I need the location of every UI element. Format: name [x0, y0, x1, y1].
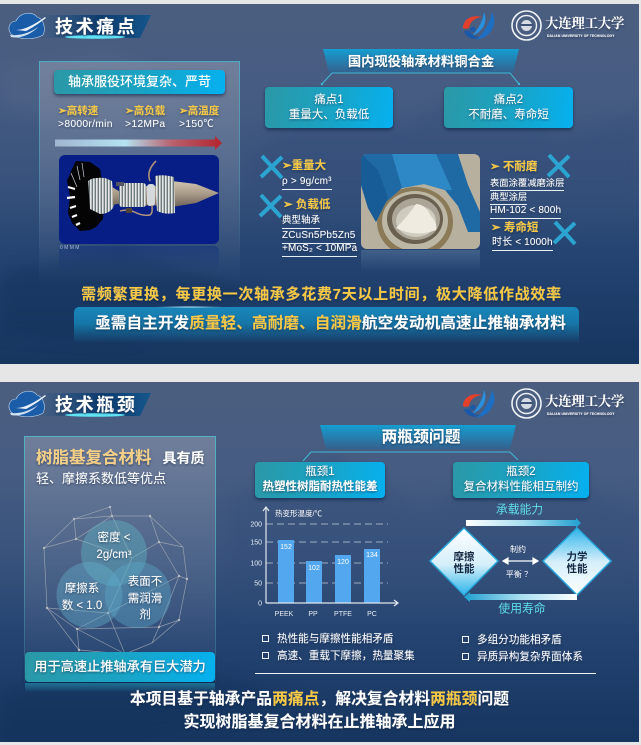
label: ➢ 负载低 — [283, 199, 330, 211]
pill: great potential — [25, 652, 215, 682]
y axis labels: 0 — [258, 600, 262, 608]
bar values: 134 — [366, 552, 378, 559]
value: 时长 < 1000h — [492, 237, 553, 248]
pill: pain point 2 — [444, 87, 573, 128]
bullet 2: 高速、重载下摩擦，热量聚集 — [277, 650, 415, 662]
title: 瓶颈2 — [506, 466, 536, 478]
logo: school emblem swirl — [463, 390, 494, 418]
university English name: DALIAN UNIVERSITY OF TECHNOLOGY — [547, 34, 615, 38]
icon: cloud and plane logo — [8, 390, 46, 417]
engine image — [59, 155, 219, 258]
y axis labels — [250, 522, 262, 608]
banner shape — [46, 393, 151, 417]
x axis labels — [275, 611, 377, 618]
highlight — [154, 306, 224, 308]
slide: technical bottlenecks — [0, 382, 639, 742]
heading text: 技术瓶颈 — [55, 395, 137, 415]
title: 痛点1 — [314, 94, 344, 106]
polyhedron nodes — [43, 506, 188, 651]
block: low load — [282, 198, 358, 257]
pill reflection — [25, 683, 215, 692]
bullet 1 — [462, 633, 562, 648]
university English name: DALIAN UNIVERSITY OF TECHNOLOGY — [547, 412, 615, 416]
circle: self lubrication — [105, 562, 171, 628]
university name: 大连理工大学 — [545, 391, 624, 410]
pill: bottleneck 2 — [453, 462, 589, 498]
background texture — [12, 264, 201, 288]
y axis labels: 100 — [250, 560, 262, 568]
description: 不耐磨、寿命短 — [468, 109, 549, 121]
panel heading pill: 轴承服役环境复杂、严苛 — [68, 74, 211, 89]
image caption marks: 0 M M M — [60, 245, 79, 251]
panel heading pill — [54, 70, 225, 94]
circle text: friction coefficient: 摩擦系 — [65, 583, 99, 595]
coating: 表面涂覆减磨涂层 — [490, 178, 564, 188]
diamond: friction performance — [430, 528, 498, 595]
title: 痛点2 — [494, 94, 523, 106]
description: 热塑性树脂耐热性能差 — [262, 481, 378, 493]
arrow: service life — [464, 592, 577, 602]
circle text: density — [96, 531, 132, 562]
label: ➢ 寿命短 — [491, 222, 538, 234]
heading text: 两瓶颈问题 — [382, 429, 460, 446]
double arrow — [503, 558, 538, 564]
circle text: self lubrication: 剂 — [139, 609, 151, 621]
bullets: bottleneck 1 — [262, 632, 415, 662]
panel: resin matrix composites — [24, 436, 216, 682]
heading: two bottlenecks — [302, 425, 518, 462]
background texture — [0, 382, 639, 742]
value: ρ > 9g/cm³ — [282, 176, 332, 187]
summary line 1: 本项目基于轴承产品两痛点，解决复合材料两瓶颈问题 — [130, 691, 509, 708]
text: project summary — [0, 689, 639, 734]
condition: high temperature — [179, 105, 220, 130]
icon: cloud and plane logo — [8, 12, 46, 39]
diamond text: friction performance: 摩擦 — [454, 550, 475, 563]
circle text: self lubrication: 需润滑 — [128, 592, 162, 604]
university name: 大连理工大学 — [545, 13, 624, 32]
panel: service environment — [39, 61, 240, 285]
bar values — [280, 544, 378, 572]
y axis labels: 200 — [250, 522, 262, 528]
logo: school emblem swirl — [463, 12, 494, 40]
x axis labels: PP — [308, 611, 318, 618]
logo: Dalian University of Technology — [511, 10, 624, 41]
circle text: self lubrication: 表面不 — [128, 576, 162, 588]
bearing load value: +MoS₂ < 10MPa — [282, 243, 357, 254]
circle text: density: 密度 < — [98, 532, 130, 544]
x axis labels: PTFE — [334, 611, 352, 618]
divider line — [255, 673, 596, 674]
icon: cross, low load — [258, 194, 282, 218]
condition: high speed — [58, 105, 113, 130]
banner shape — [46, 15, 151, 39]
bars — [278, 540, 380, 603]
diagram: performance trade-off: 性能 — [566, 562, 588, 575]
arrow: load capacity — [466, 518, 581, 528]
icon: cross, heavy weight — [260, 154, 284, 180]
description: 重量大、负载低 — [289, 109, 369, 121]
axis title: 热变形温度/℃ — [275, 508, 323, 518]
bullets: bottleneck 2 — [462, 633, 572, 665]
text: frequent replacement: 需频繁更换，每更换一次轴承多花费7天以上时间，极大降低作战效率 — [81, 286, 562, 303]
bar values: 120 — [337, 559, 349, 566]
bar values: 102 — [308, 565, 320, 572]
trapezoid and connector lines — [320, 49, 520, 86]
header banner: 技术痛点 — [8, 12, 151, 39]
pill: pain point 1 — [265, 87, 393, 128]
goal text: 亟需自主开发质量轻、高耐磨、自润滑航空发动机高速止推轴承材料 — [95, 315, 566, 332]
trapezoid and connector lines — [302, 425, 518, 462]
diagram: performance trade-off: 性能 — [454, 562, 475, 575]
circle text: friction coefficient: 数 < 1.0 — [62, 600, 102, 612]
diamond text: mechanical performance: 力学 — [566, 550, 588, 563]
label: ➢高负载 — [125, 105, 165, 117]
label: constraint: 制约 — [510, 544, 526, 554]
value: >12MPa — [125, 119, 165, 130]
icon: cross, not wear resistant — [546, 154, 570, 178]
label: load capacity: 承载能力 — [496, 502, 543, 516]
value: >150℃ — [179, 119, 214, 130]
circle text: self lubrication — [128, 575, 162, 621]
header banner: 技术瓶颈 — [8, 390, 151, 417]
pill: bottleneck 1 — [255, 462, 385, 498]
label: ➢ 不耐磨 — [490, 161, 537, 173]
photo: worn bearing — [361, 154, 480, 266]
axes — [263, 507, 398, 606]
heading text: 技术痛点 — [55, 17, 137, 37]
slide: technical pain points — [0, 4, 639, 364]
diamond: mechanical performance — [543, 528, 611, 595]
circle: friction coefficient — [56, 562, 122, 628]
seal — [511, 388, 542, 419]
icon: cross, short service life — [552, 220, 576, 246]
pill: great potential: 用于高速止推轴承有巨大潜力 — [34, 659, 206, 674]
typical coating: 典型涂层 — [490, 192, 527, 202]
label: ➢高转速 — [58, 105, 98, 117]
bullet 1: 热性能与摩擦性能相矛盾 — [277, 633, 394, 645]
y axis labels: 50 — [254, 580, 262, 588]
description: 复合材料性能相互制约 — [464, 481, 578, 493]
label: ➢高温度 — [179, 105, 219, 117]
coating life: HM-102 < 800h — [490, 205, 561, 216]
x axis labels: PC — [367, 611, 377, 618]
panel heading: 树脂基复合材料 具有质 — [36, 449, 204, 467]
block: heavy weight — [282, 158, 332, 190]
bearing alloy: ZCuSn5Pb5Zn5 — [282, 230, 356, 241]
summary line 2: 实现树脂基复合材料在止推轴承上应用 — [183, 714, 456, 731]
title: 瓶颈1 — [305, 466, 335, 478]
block: not wear resistant — [490, 160, 564, 219]
bar chart: heat deflection temperature — [250, 506, 399, 618]
arrow: rising severity — [55, 136, 222, 150]
grid lines — [266, 524, 388, 583]
label: balance: 平衡 ？ — [506, 569, 532, 579]
label: ➢重量大 — [282, 160, 326, 172]
bar values: 152 — [280, 544, 292, 551]
bullet 1: 多组分功能相矛盾 — [477, 634, 562, 646]
wire polyhedron — [44, 507, 187, 654]
heading: current copper alloy — [320, 49, 520, 86]
panel body text: 轻、摩擦系数低等优点 — [36, 471, 166, 486]
bar: development goal — [74, 307, 579, 343]
circle text: friction coefficient — [62, 582, 103, 612]
x axis labels: PEEK — [275, 611, 294, 618]
circle: density — [81, 520, 147, 586]
heading text: 国内现役轴承材料铜合金 — [348, 54, 494, 69]
network polyhedron and three property circles — [42, 506, 188, 652]
label: service life: 使用寿命 — [498, 602, 546, 616]
value: >8000r/min — [58, 119, 113, 130]
seal — [511, 10, 542, 41]
block: short service life — [491, 220, 553, 251]
condition: high load — [125, 105, 166, 130]
logo: Dalian University of Technology — [511, 388, 624, 419]
y axis labels: 150 — [250, 540, 262, 546]
bullet 2: 异质异构复杂界面体系 — [477, 651, 583, 663]
circle text: density: 2g/cm³ — [96, 548, 132, 560]
diagram: performance trade-off — [428, 500, 588, 618]
typical bearing: 典型轴承 — [282, 215, 320, 226]
